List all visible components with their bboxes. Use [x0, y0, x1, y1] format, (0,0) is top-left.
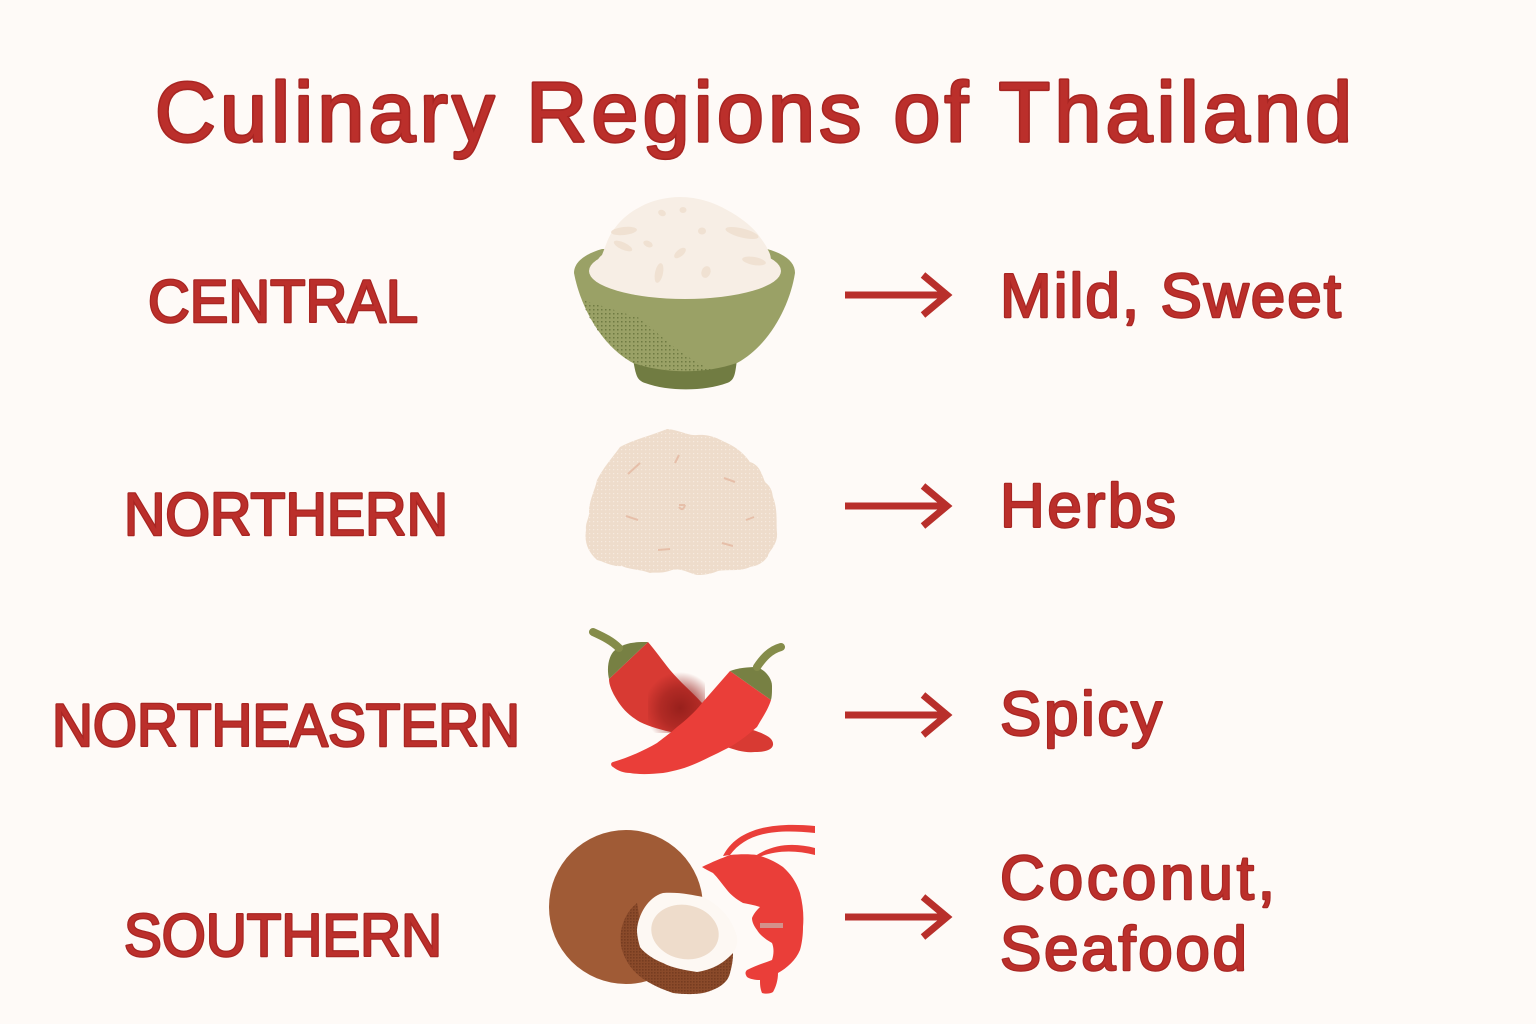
coconut: whole: [549, 830, 703, 984]
flavor: coconut, seafood: Seafood: [1000, 915, 1247, 984]
region label: northern: NORTHERN: [124, 481, 448, 548]
chili: back: [609, 642, 773, 752]
region label: central: CENTRAL: [148, 268, 418, 335]
icon: sticky rice: [585, 429, 777, 575]
icon: rice bowl: [574, 197, 795, 389]
coconut: half shell: [621, 903, 733, 994]
arrow: [845, 695, 947, 735]
title: Culinary Regions of Thailand: [155, 65, 1352, 159]
chili: front: [611, 671, 771, 774]
region label: northeastern: NORTHEASTERN: [52, 692, 520, 759]
flavor: mild, sweet: Mild, Sweet: [1000, 262, 1341, 331]
shrimp: [702, 854, 803, 994]
flavor: coconut, seafood: [1000, 844, 1275, 984]
region label: southern: SOUTHERN: [124, 902, 442, 969]
flavor: coconut, seafood: Coconut,: [1000, 844, 1275, 913]
arrow: [845, 486, 947, 526]
row: northern: [124, 429, 1176, 575]
arrow: [845, 897, 947, 937]
flavor: spicy: Spicy: [1000, 680, 1162, 749]
row: northeastern: [52, 632, 1162, 774]
row: central: [148, 197, 1341, 389]
icon: chili peppers: [593, 632, 781, 774]
icon: coconut and shrimp: [549, 825, 815, 994]
row: southern: [124, 825, 1275, 994]
arrow: [845, 275, 947, 315]
flavor: herbs: Herbs: [1000, 472, 1176, 541]
